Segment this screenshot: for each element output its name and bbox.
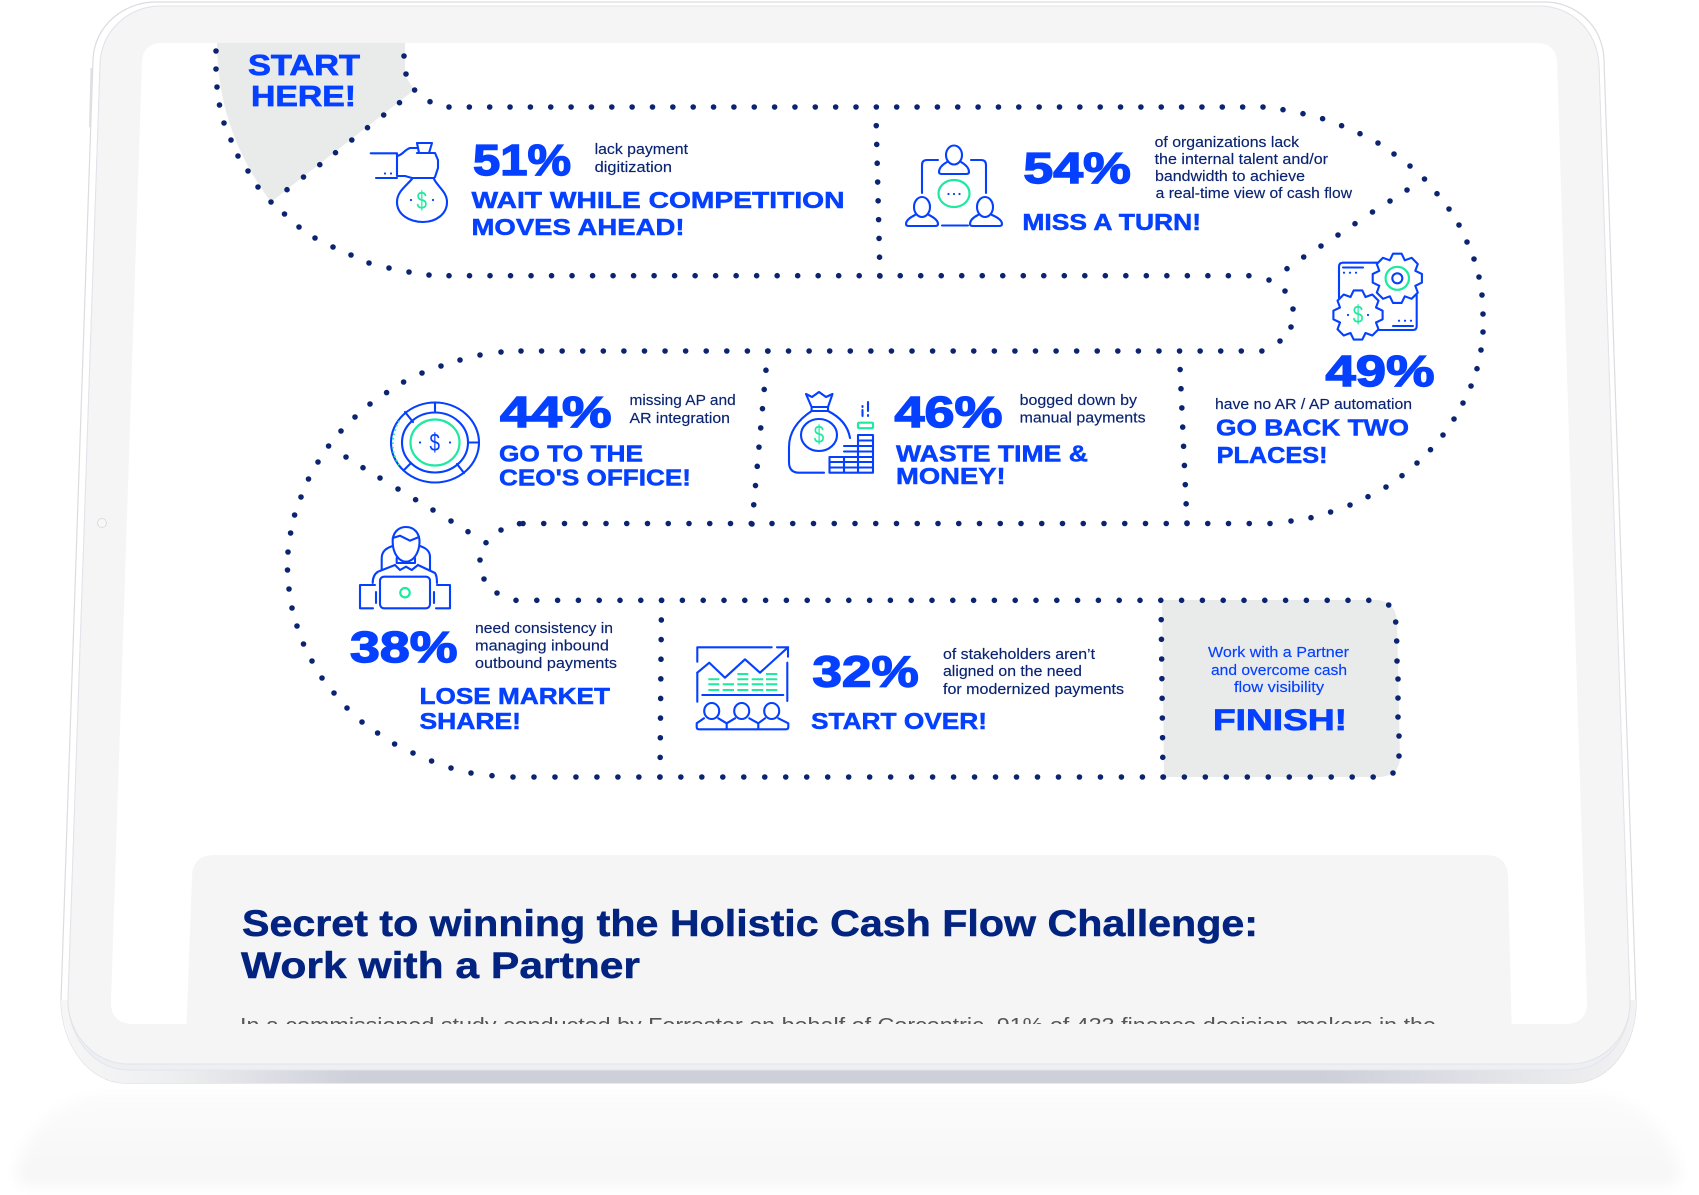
body text cut off by the screen edge: In a commissioned study conducted by Forrester on behalf of Corcentric, 91% of 433 finance decision-makers in the: [240, 1015, 1436, 1037]
step: 44% CEO: AR integration: [630, 411, 730, 427]
finish text: Work with a Partner: [1208, 644, 1349, 661]
step: 54% miss a turn: the internal talent and/or: [1155, 152, 1328, 168]
step: 38% market share: managing inbound: [475, 639, 609, 655]
step: 54% miss a turn: of organizations lack: [1155, 135, 1300, 151]
step: 49% go back: GO BACK TWO: [1216, 415, 1409, 441]
tablet shadow: [15, 1096, 1681, 1186]
icon: money bag and coins: $: [814, 421, 824, 449]
step: 54% miss a turn: MISS A TURN!: [1022, 209, 1201, 235]
step: 51% wait: WAIT WHILE COMPETITION: [472, 187, 844, 213]
step: 38% market share: [350, 527, 617, 734]
step: 49% go back: PLACES!: [1217, 442, 1328, 468]
step: 46% waste: MONEY!: [896, 463, 1006, 489]
icon: hand holding money bag: $: [416, 187, 427, 215]
heading: Work with a Partner: [241, 945, 640, 986]
start flag: HERE!: [251, 81, 356, 113]
icon: audience and chart: [697, 647, 788, 729]
step: 49% go back: [1215, 254, 1434, 468]
dotted game path: [216, 51, 1483, 777]
finish text: flow visibility: [1234, 679, 1325, 696]
start flag: START: [248, 50, 360, 82]
step: 49% go back: 49%: [1326, 347, 1434, 396]
step: 46% waste: 46%: [894, 388, 1002, 437]
step: 46% waste: [789, 388, 1146, 489]
step: 46% waste: WASTE TIME &: [896, 441, 1088, 467]
step: 44% CEO: [391, 388, 736, 491]
step: 44% CEO: CEO'S OFFICE!: [499, 465, 691, 491]
step: 51% wait: lack payment: [595, 142, 688, 158]
step: 54% miss a turn: 54%: [1023, 144, 1131, 193]
step: 51% wait: 51%: [473, 136, 571, 185]
step: 38% market share: SHARE!: [420, 708, 521, 734]
step: 44% CEO: GO TO THE: [499, 441, 643, 467]
step: 32% start over: 32%: [812, 648, 919, 697]
icon: coin dial: $: [430, 429, 440, 457]
step: 32% start over: START OVER!: [811, 708, 987, 734]
panel: secret to winning: [186, 855, 1512, 1040]
icon: hand holding money bag: [371, 143, 447, 222]
start flag: [217, 40, 414, 202]
heading: Secret to winning the Holistic Cash Flow Challenge:: [242, 903, 1258, 944]
finish text: FINISH!: [1213, 704, 1347, 737]
icon: money bag and coins: [789, 392, 873, 473]
step: 54% miss a turn: [906, 135, 1353, 235]
step: 44% CEO: missing AP and: [630, 393, 736, 409]
step: 46% waste: manual payments: [1020, 411, 1146, 427]
icon: gears and document: $: [1353, 301, 1363, 329]
icon: gears and document: [1333, 254, 1422, 340]
finish text: and overcome cash: [1211, 662, 1347, 679]
icon: people network: [906, 146, 1002, 226]
step: 32% start over: of stakeholders aren’t: [943, 647, 1095, 663]
step: 54% miss a turn: bandwidth to achieve: [1155, 169, 1305, 185]
step: 38% market share: need consistency in: [475, 621, 613, 637]
step: 49% go back: have no AR / AP automation: [1215, 397, 1412, 413]
step: 51% wait: MOVES AHEAD!: [472, 214, 684, 240]
step: 54% miss a turn: a real-time view of cash flow: [1156, 186, 1353, 202]
finish box background: [1162, 600, 1400, 777]
step: 38% market share: 38%: [350, 623, 458, 672]
step: 44% CEO: 44%: [500, 388, 612, 437]
step: 32% start over: aligned on the need: [943, 664, 1082, 680]
icon: coin dial: [391, 402, 479, 482]
step: 46% waste: bogged down by: [1020, 393, 1138, 409]
step: 51% wait: digitization: [595, 160, 672, 176]
screen content: [186, 40, 1512, 1040]
icon: person at laptop: [360, 527, 450, 608]
step: 32% start over: for modernized payments: [943, 682, 1124, 698]
step: 38% market share: outbound payments: [475, 656, 617, 672]
finish text: [1208, 644, 1349, 737]
step: 51% wait: [370, 142, 843, 236]
step: 38% market share: LOSE MARKET: [420, 683, 610, 709]
heading: [240, 908, 1254, 978]
step: 32% start over: [697, 647, 1124, 734]
